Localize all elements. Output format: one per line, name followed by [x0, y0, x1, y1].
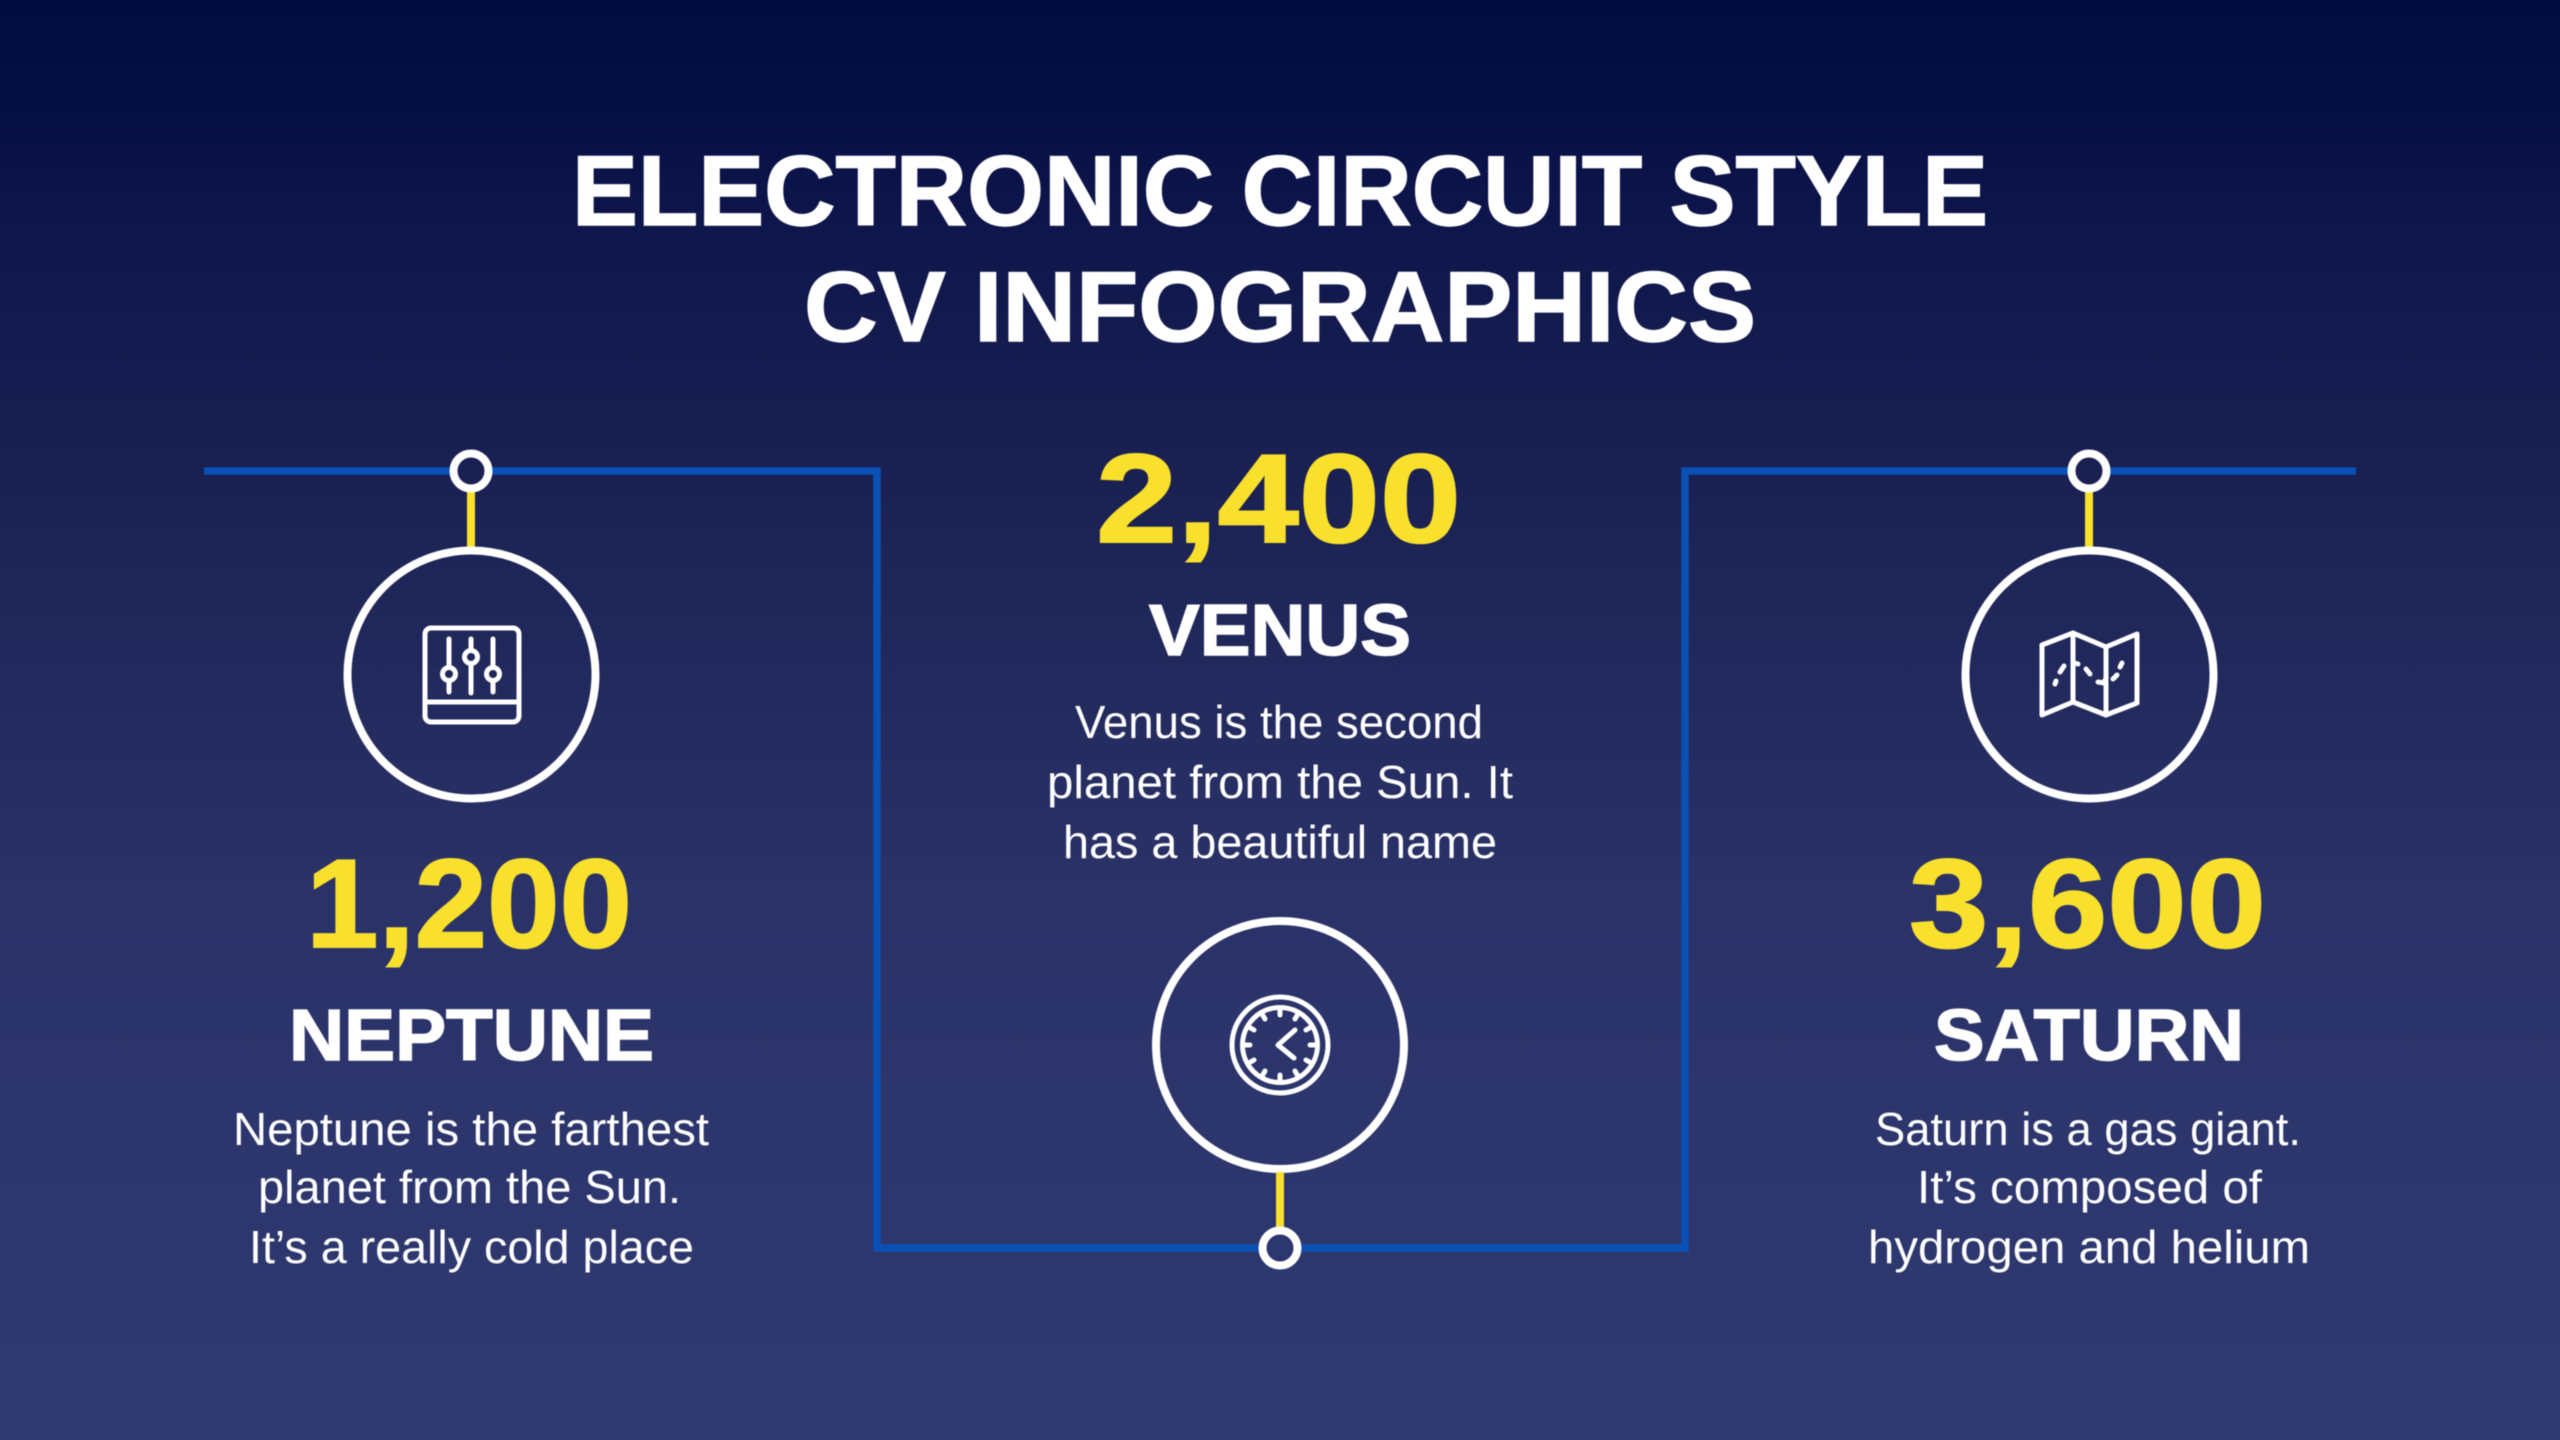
panel: Neptune — [233, 454, 709, 1273]
text: Venus description — [1047, 696, 1513, 868]
title: CV INFOGRAPHICS — [804, 251, 1756, 362]
circuit trace line — [204, 471, 2356, 1248]
icon circle: Neptune — [348, 550, 596, 798]
icon: sliders — [425, 628, 519, 722]
text: Neptune description: Neptune is the farthest — [233, 1103, 709, 1155]
text: Venus description: has a beautiful name — [1063, 816, 1497, 868]
value: 2,400: 2,400 — [1096, 428, 1461, 569]
text: Neptune description — [233, 1103, 709, 1273]
content layer — [204, 135, 2356, 1273]
panel: Saturn — [1868, 454, 2310, 1273]
text: Saturn description: hydrogen and helium — [1868, 1221, 2310, 1273]
panel: Venus — [1047, 428, 1513, 1266]
text: Venus description: planet from the Sun. It — [1047, 756, 1513, 808]
heading: Venus: VENUS — [1149, 591, 1411, 671]
text: Saturn description — [1868, 1103, 2310, 1273]
title: ELECTRONIC CIRCUIT STYLE — [572, 135, 1988, 246]
icon circle: Saturn — [1966, 550, 2214, 798]
heading: Neptune: NEPTUNE — [289, 996, 654, 1076]
icon: clock — [1232, 997, 1328, 1093]
text: Venus description: Venus is the second — [1075, 696, 1483, 748]
connector: Saturn node — [2072, 454, 2106, 550]
connector: Venus node — [1262, 1172, 1298, 1266]
text: Saturn description: Saturn is a gas giant. — [1875, 1103, 2301, 1155]
text: Neptune description: It’s a really cold place — [249, 1221, 694, 1273]
value: 1,200: 1,200 — [306, 833, 632, 974]
value: 3,600: 3,600 — [1909, 833, 2266, 974]
connector: Neptune node — [454, 454, 488, 550]
icon: folded map — [2042, 633, 2137, 715]
title — [572, 135, 1988, 362]
text: Neptune description: planet from the Sun. — [258, 1161, 681, 1213]
icon circle: Venus — [1156, 921, 1404, 1169]
heading: Saturn: SATURN — [1934, 996, 2244, 1076]
text: Saturn description: It’s composed of — [1917, 1161, 2262, 1213]
